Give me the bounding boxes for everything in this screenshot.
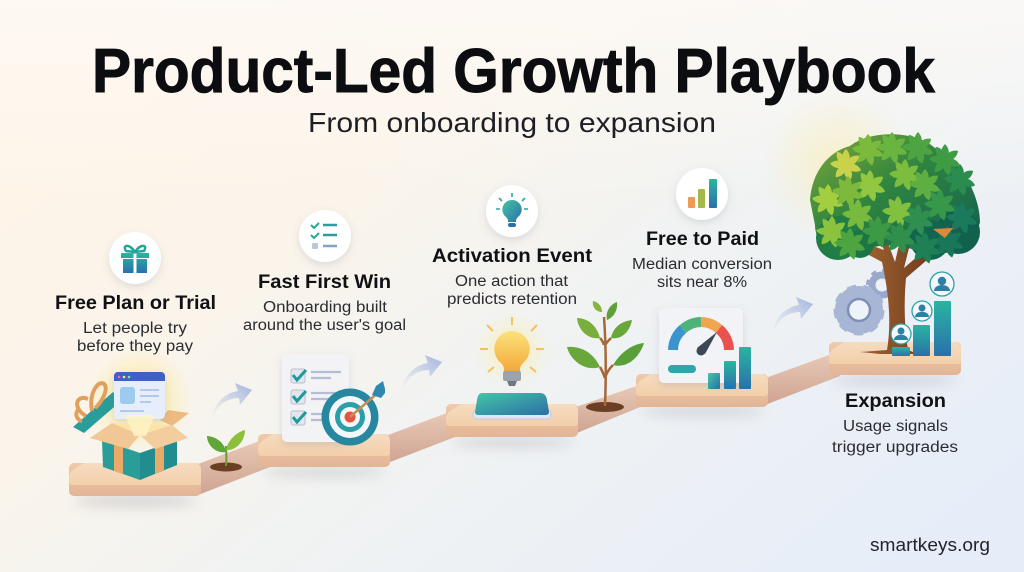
footer: site name: smartkeys.org xyxy=(870,535,990,555)
description xyxy=(832,418,958,456)
panel: expansion xyxy=(763,90,980,456)
heading: Free to Paid xyxy=(646,229,759,250)
description: sits near 8% xyxy=(657,274,747,291)
platform 2 xyxy=(258,434,390,478)
description: before they pay xyxy=(77,338,193,355)
canopy mass xyxy=(810,134,980,256)
heading: Fast First Win xyxy=(258,272,391,293)
staircase path xyxy=(190,351,840,495)
panel: free plan or trial xyxy=(55,232,245,507)
description xyxy=(243,299,406,334)
description xyxy=(77,320,193,355)
platform 4 xyxy=(636,374,768,417)
description xyxy=(632,256,772,291)
icon: gears xyxy=(836,271,896,333)
illustration: checklist and target xyxy=(282,354,385,446)
platform 3 xyxy=(446,404,578,448)
heading: Free Plan or Trial xyxy=(55,293,216,314)
arrow 3 xyxy=(773,297,813,332)
description: around the user's goal xyxy=(243,317,406,334)
platform 5 xyxy=(829,342,961,386)
subtitle: From onboarding to expansion xyxy=(308,107,716,138)
heading: Expansion xyxy=(845,391,946,412)
description xyxy=(447,273,577,308)
icon: sprout xyxy=(207,430,245,472)
icon: young plant xyxy=(567,301,644,412)
description: One action that xyxy=(455,273,569,290)
description: predicts retention xyxy=(447,291,577,308)
leaf clusters xyxy=(812,132,978,264)
icon: bar chart xyxy=(676,168,728,220)
icon: checklist xyxy=(299,210,351,262)
description: trigger upgrades xyxy=(832,439,958,456)
description: Onboarding built xyxy=(263,299,388,316)
description: Let people try xyxy=(83,320,187,337)
bars with user avatars xyxy=(891,272,954,356)
panel: fast first win xyxy=(243,210,406,478)
illustration: open gift box with app window xyxy=(73,348,192,480)
illustration: light bulb over button xyxy=(473,312,551,419)
panel: activation event xyxy=(432,185,593,448)
arrow 1 xyxy=(212,383,252,418)
platform 1 xyxy=(69,463,201,507)
icon: light bulb xyxy=(486,185,538,237)
illustration: tree xyxy=(763,90,980,354)
panel: free to paid xyxy=(632,168,772,417)
title: Product-Led Growth Playbook xyxy=(92,37,935,106)
description: Usage signals xyxy=(843,418,948,435)
heading: Activation Event xyxy=(432,246,593,267)
illustration: gauge dashboard xyxy=(659,308,751,389)
arrow 2 xyxy=(402,355,442,390)
icon: gift xyxy=(109,232,161,284)
description: Median conversion xyxy=(632,256,772,273)
